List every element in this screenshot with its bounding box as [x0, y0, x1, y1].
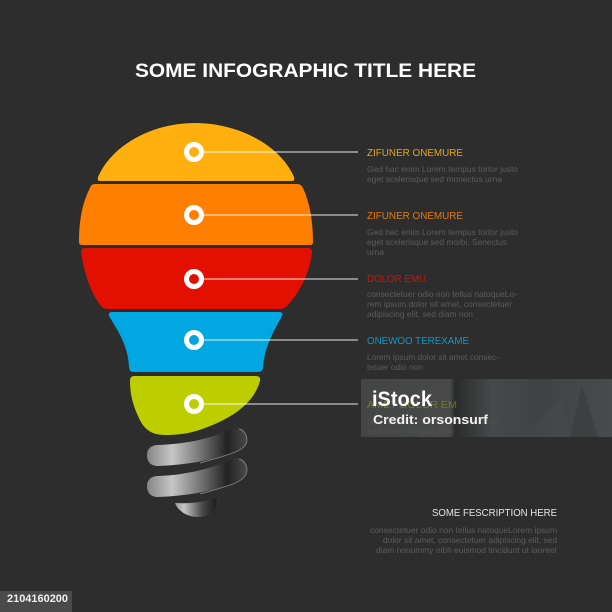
bulb segment: green	[130, 376, 260, 435]
bulb segment: blue	[109, 312, 283, 372]
text block 2: ZIFUNER ONEMURE	[367, 211, 463, 222]
image id tag: 2104160200	[7, 593, 68, 605]
marker 4	[186, 332, 202, 348]
text block 4: Lorem ipsum dolor sit amet consec-	[367, 352, 499, 362]
text block 5	[367, 400, 499, 436]
text block 5: sed diam magna nam	[367, 426, 455, 436]
light bulb	[79, 123, 313, 517]
text block 3: adipiscing elit, sed diam non	[367, 309, 473, 319]
watermark shard	[570, 385, 598, 437]
text block 4: tetuer odio non	[367, 362, 423, 372]
text block 3: DOLOR EMU	[367, 274, 426, 285]
marker 1	[186, 144, 202, 160]
description block: consectetuer odio non tellus natoqueLorem ipsum	[370, 525, 557, 535]
watermark logo: iStock	[372, 388, 432, 411]
text block 2	[367, 211, 518, 257]
description block	[370, 508, 558, 555]
description block: SOME FESCRIPTION HERE	[432, 508, 557, 519]
text block 4: ONEWOO TEREXAME	[367, 336, 469, 347]
description block: dolor sit amet, consectetuer adipiscing elit, sed	[383, 535, 557, 545]
screw base	[147, 428, 247, 517]
marker 2	[186, 208, 202, 222]
watermark shard 2	[525, 398, 572, 437]
text block 2: Ged hac enim Lorem tempus tortor justo	[367, 227, 518, 237]
screw tip	[175, 497, 219, 517]
text block 2: eget scelerisque sed morbi. Senectus	[367, 237, 507, 247]
text block 3	[367, 274, 517, 319]
connector line 5	[199, 403, 358, 405]
text block 3: rem ipsum dolor sit amet, consectetuer	[367, 299, 512, 309]
watermark banner	[361, 379, 612, 437]
bulb segment: yellow	[98, 123, 294, 181]
bulb segment: orange	[79, 184, 313, 245]
text block 4	[367, 336, 499, 372]
screw thread 2	[147, 458, 247, 497]
text block 5: AMET DOLOR EM	[367, 400, 457, 411]
text block 1	[367, 148, 518, 184]
text block 5: consectetuer odio non tellus amet sed	[367, 416, 499, 426]
text block 1: Ged hac enim Lorem tempus tortor justo	[367, 164, 518, 174]
screw thread 1 edge	[200, 429, 247, 463]
marker 5	[186, 396, 202, 412]
connector line 2	[199, 214, 358, 216]
screw thread 2 edge	[200, 459, 247, 494]
watermark credit: Credit: orsonsurf	[373, 412, 489, 427]
screw thread 1	[147, 428, 247, 466]
text block 3: consectetuer odio non tellus natoqueLo-	[367, 289, 517, 299]
text block 1: ZIFUNER ONEMURE	[367, 148, 463, 159]
title: SOME INFOGRAPHIC TITLE HERE	[135, 60, 476, 82]
connector line 1	[199, 151, 358, 153]
text block 2: urna	[367, 247, 384, 257]
marker 3	[186, 272, 202, 286]
bulb segment: red	[81, 248, 312, 309]
connector line 4	[199, 339, 358, 341]
text block 1: eget scelerisque sed monectus urna	[367, 174, 502, 184]
image id tag	[0, 591, 72, 612]
description block: diam nonummy nibh euismod tincidunt ut laoreet	[376, 545, 558, 555]
connector line 3	[199, 278, 358, 280]
